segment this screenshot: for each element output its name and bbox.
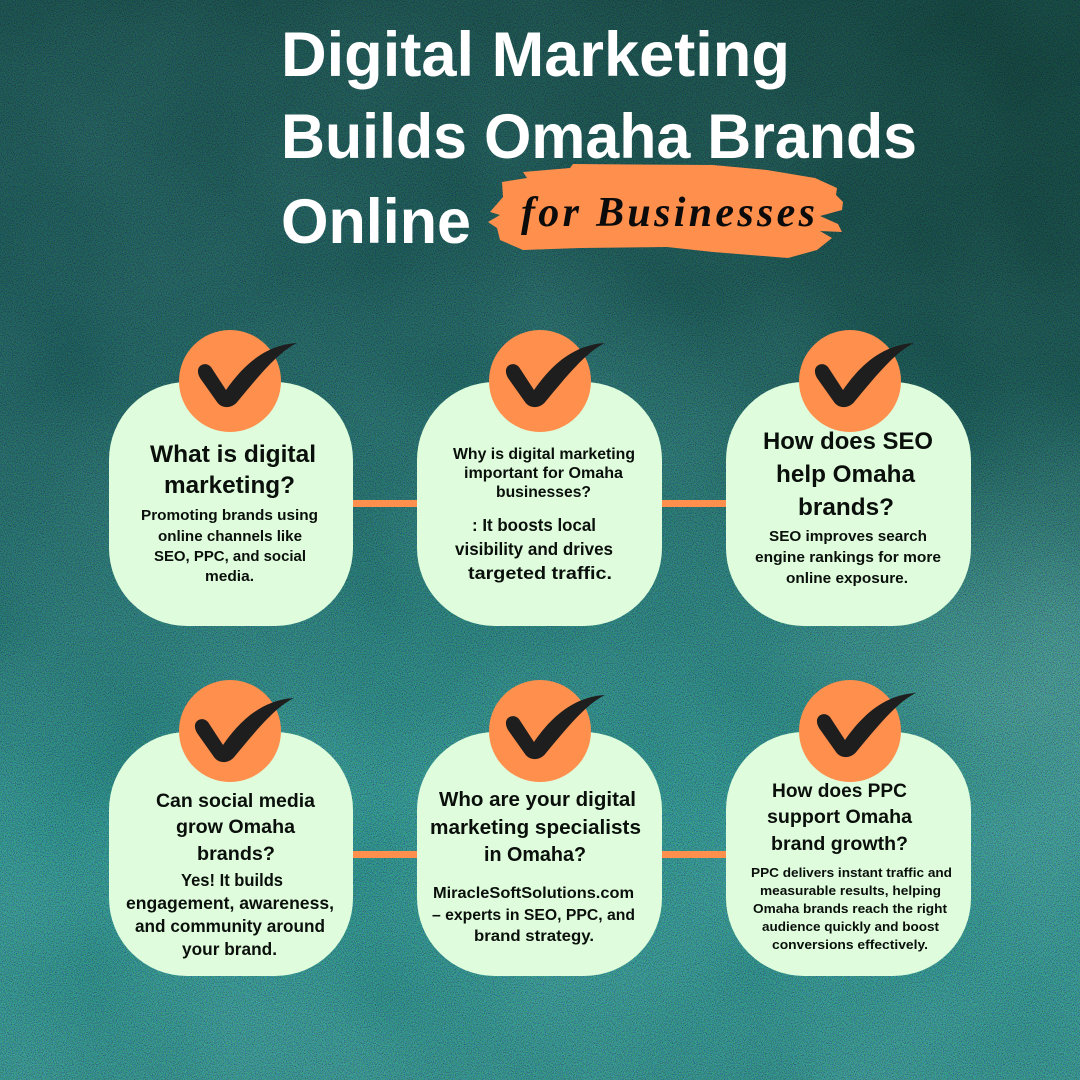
- heading 3: [763, 428, 933, 521]
- heading 6: brand growth?: [771, 833, 908, 855]
- body 4: and community around: [135, 916, 325, 936]
- icon: check badge 5: [489, 680, 605, 782]
- body 2: : It boosts local: [472, 515, 596, 535]
- connectors: [353, 500, 726, 858]
- body 6: measurable results, helping: [760, 883, 941, 898]
- heading 2: important for Omaha: [464, 465, 623, 482]
- body 3: online exposure.: [786, 571, 908, 587]
- body 6: conversions effectively.: [772, 937, 928, 952]
- body 5: brand strategy.: [474, 928, 594, 945]
- title: Online: [281, 187, 471, 257]
- body 4: [126, 870, 334, 959]
- heading 4: brands?: [197, 843, 275, 865]
- body 1: media.: [205, 569, 254, 585]
- icon: check badge 3: [799, 330, 914, 432]
- heading 5: [430, 788, 641, 866]
- panel: what is digital marketing: [109, 330, 353, 626]
- body 2: [455, 515, 613, 583]
- title: Builds Omaha Brands: [281, 102, 917, 172]
- body 1: online channels like: [158, 529, 302, 545]
- brush badge: for Businesses: for Businesses: [521, 190, 815, 236]
- icon: check badge 4: [179, 680, 294, 782]
- heading 5: Who are your digital: [439, 788, 636, 811]
- body 3: [755, 529, 941, 587]
- body 2: visibility and drives: [455, 539, 613, 559]
- icon: check badge 6: [799, 680, 916, 782]
- heading 6: How does PPC: [772, 780, 907, 802]
- body 4: your brand.: [182, 939, 277, 959]
- heading 3: brands?: [798, 494, 894, 521]
- body 6: Omaha brands reach the right: [753, 901, 948, 916]
- heading 5: marketing specialists: [430, 816, 641, 839]
- body 5: [432, 885, 635, 945]
- title: Digital Marketing: [281, 20, 790, 90]
- heading 6: support Omaha: [767, 806, 912, 828]
- panel: how does SEO help: [726, 330, 971, 626]
- body 6: PPC delivers instant traffic and: [751, 865, 952, 880]
- heading 2: Why is digital marketing: [453, 446, 635, 463]
- body 1: Promoting brands using: [141, 508, 318, 524]
- heading 1: marketing?: [164, 472, 295, 499]
- heading 4: [156, 790, 315, 865]
- body 6: [751, 865, 952, 952]
- heading 2: businesses?: [496, 484, 591, 501]
- heading 1: What is digital: [150, 441, 316, 468]
- heading 5: in Omaha?: [484, 843, 586, 866]
- heading 1: [150, 441, 316, 499]
- body 1: SEO, PPC, and social: [154, 549, 306, 565]
- body 3: engine rankings for more: [755, 550, 941, 566]
- body 3: SEO improves search: [769, 529, 927, 545]
- heading 2: [453, 446, 635, 501]
- panel: who are your specialists: [417, 680, 662, 976]
- body 1: [141, 508, 318, 585]
- panel: can social media grow: [109, 680, 353, 976]
- heading 4: Can social media: [156, 790, 315, 812]
- body 5: – experts in SEO, PPC, and: [432, 907, 635, 924]
- panel: why is digital marketing important: [417, 330, 662, 626]
- body 6: audience quickly and boost: [762, 919, 940, 934]
- icon: check badge 1: [179, 330, 297, 432]
- panel: how does PPC support: [726, 680, 971, 976]
- heading 6: [767, 780, 912, 855]
- body 4: Yes! It builds: [181, 870, 283, 890]
- heading 4: grow Omaha: [176, 816, 295, 838]
- body 5: MiracleSoftSolutions.com: [433, 885, 634, 902]
- heading 3: help Omaha: [776, 461, 915, 488]
- heading 3: How does SEO: [763, 428, 933, 455]
- brush badge: for Businesses: [488, 164, 843, 258]
- body 4: engagement, awareness,: [126, 893, 334, 913]
- body 2: targeted traffic.: [468, 563, 612, 583]
- icon: check badge 2: [489, 330, 605, 432]
- title: [281, 20, 917, 257]
